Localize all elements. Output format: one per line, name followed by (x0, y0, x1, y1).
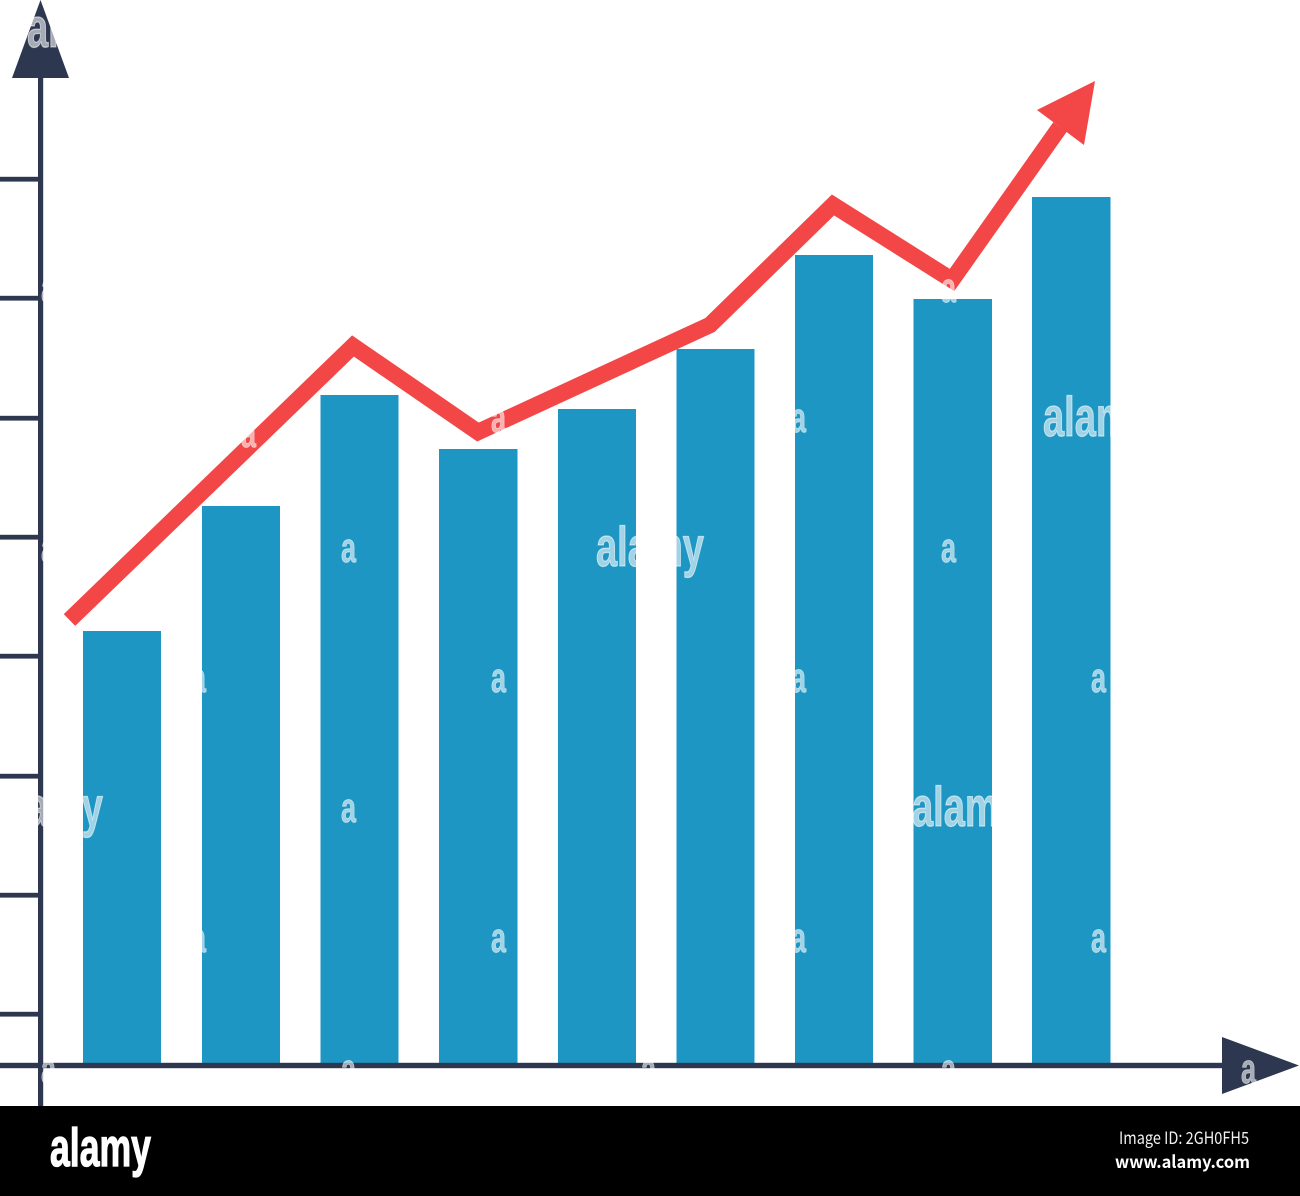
watermarks: a (241, 409, 256, 456)
watermarks: a (1091, 914, 1106, 961)
website url: www.alamy.com (1115, 1148, 1250, 1173)
alamy logo: alamy (50, 1118, 151, 1178)
watermarks: a (41, 524, 56, 571)
watermarks: a (491, 394, 506, 441)
image id: Image ID: 2GH0FH5 (1119, 1124, 1249, 1149)
watermarks: a (1091, 654, 1106, 701)
watermarks: a (41, 264, 56, 311)
watermarks: alamy (596, 515, 704, 578)
watermarks: a (1241, 1045, 1256, 1092)
watermarks: a (491, 914, 506, 961)
watermarks: a (791, 654, 806, 701)
watermarks: a (641, 1045, 656, 1092)
watermarks: a (941, 264, 956, 311)
watermarks: a (191, 914, 206, 961)
footer bar (0, 1106, 1300, 1196)
red trend arrow (70, 81, 1095, 620)
watermarks: a (341, 524, 356, 571)
watermarks: a (191, 654, 206, 701)
y axis (0, 0, 69, 1106)
bar chart (83, 197, 1110, 1064)
watermarks: a (791, 394, 806, 441)
watermarks: a (341, 1045, 356, 1092)
x axis (0, 1037, 1299, 1094)
watermarks: a (341, 784, 356, 831)
watermarks: a (791, 914, 806, 961)
watermarks: a (941, 1045, 956, 1092)
watermarks: alamy (1043, 385, 1151, 448)
watermarks: a (941, 524, 956, 571)
watermarks: a (41, 1045, 56, 1092)
watermarks: a (491, 654, 506, 701)
watermarks: alamy (912, 775, 1020, 838)
